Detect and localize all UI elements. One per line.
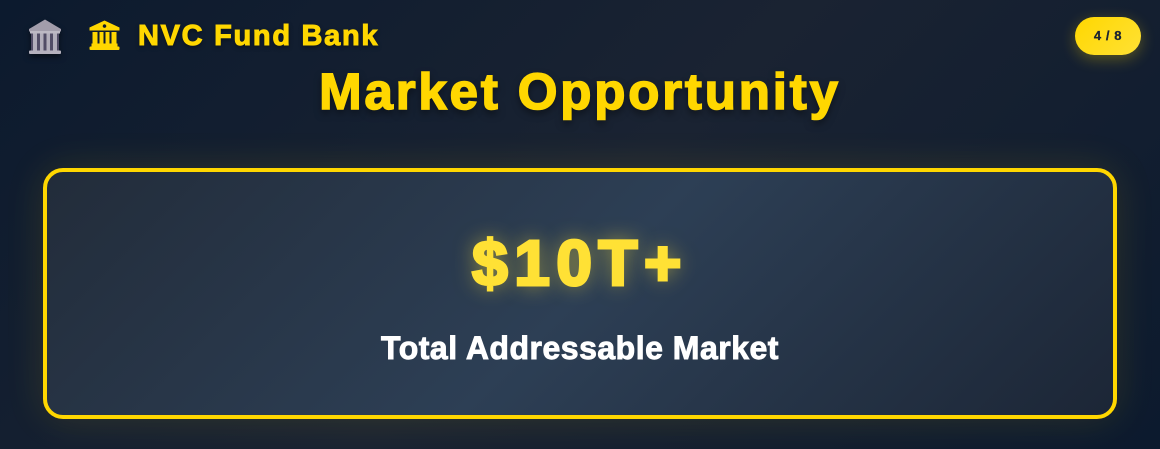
market value: $10T+ [472, 226, 688, 298]
page badge: 4 / 8 [1094, 28, 1122, 43]
brand name: NVC Fund Bank [138, 20, 379, 52]
title: Market Opportunity [319, 63, 841, 120]
header icon: classical building [29, 20, 61, 58]
market label: Total Addressable Market [381, 330, 779, 366]
panel: total addressable market [43, 168, 1117, 419]
logo icon: yellow bank [90, 20, 120, 50]
page badge [1075, 17, 1141, 55]
